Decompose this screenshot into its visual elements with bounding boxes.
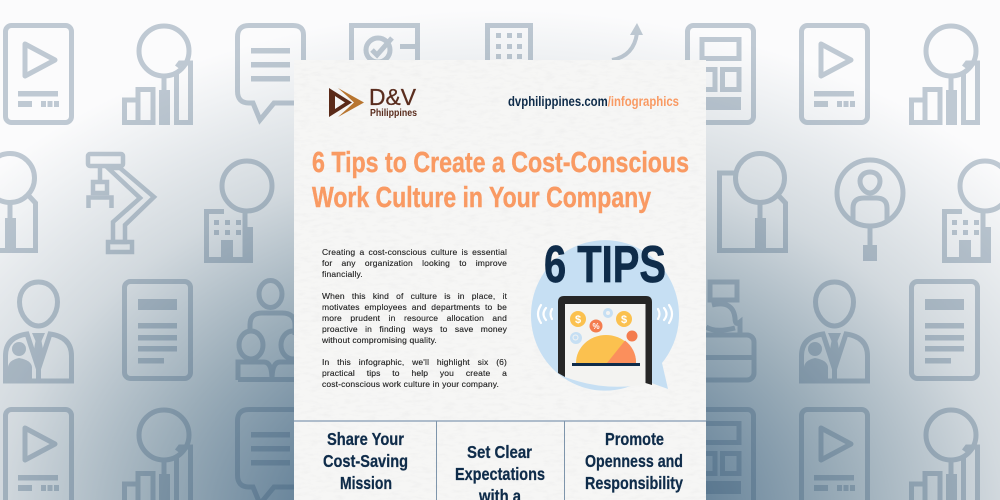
logo: D&V Philippines: Philippines <box>370 108 417 119</box>
illustration: tablet in speech bubble <box>531 240 679 391</box>
intro paragraph 2: proactive in finding ways to save money <box>322 324 507 334</box>
tip column 2: Expectations <box>455 464 545 484</box>
intro paragraph 3 <box>322 357 507 389</box>
intro paragraph 2: without compromising quality. <box>322 335 437 345</box>
tip column 1: Mission <box>340 473 392 493</box>
logo: D&V Philippines <box>329 84 417 119</box>
coins <box>570 308 638 344</box>
website url: dvphilippines.com/infographics <box>508 93 679 109</box>
tablet screen <box>565 304 646 387</box>
sound waves <box>538 305 672 323</box>
title <box>312 147 689 214</box>
title: Work Culture in Your Company <box>312 182 651 214</box>
row 2 icons <box>0 154 1000 263</box>
intro paragraph 3: cost-conscious work culture in your company. <box>322 379 499 389</box>
tip column 3: Promote <box>605 429 664 449</box>
intro paragraph 3: practical tips to help you create a <box>322 368 507 378</box>
intro paragraph 1 <box>322 247 507 279</box>
tablet frame <box>558 296 652 385</box>
intro text block <box>322 247 507 389</box>
coins: % <box>592 322 600 331</box>
row 3 icons <box>6 280 978 382</box>
intro paragraph 2: more prudent in resource allocation and <box>322 313 507 323</box>
coins: $ <box>621 314 627 326</box>
speech bubble <box>531 240 679 391</box>
tip column 2: Set Clear <box>467 442 532 462</box>
tip column 1 <box>323 429 408 493</box>
tip column 1: Cost-Saving <box>323 451 408 471</box>
heading: 6 TIPS: 6 TIPS <box>544 236 666 294</box>
intro paragraph 2: motivates employees and departments to be <box>322 302 507 312</box>
intro paragraph 2: When this kind of culture is in place, it <box>322 291 507 301</box>
tip column 3: Openness and <box>585 451 683 471</box>
title: 6 Tips to Create a Cost-Conscious <box>312 147 689 179</box>
tip column 3 <box>585 429 683 493</box>
row 4 icons <box>6 410 978 500</box>
coins: $ <box>575 314 581 326</box>
intro paragraph 3: In this infographic, we'll highlight six (6) <box>322 357 507 367</box>
row 1 icons <box>6 23 978 125</box>
intro paragraph 2 <box>322 291 507 345</box>
tip column 2 <box>455 442 545 500</box>
divider lines <box>294 420 706 500</box>
tip column 1: Share Your <box>327 429 404 449</box>
intro paragraph 1: financially. <box>322 269 363 279</box>
intro paragraph 1: Creating a cost-conscious culture is essential <box>322 247 507 257</box>
panel: paper card <box>294 60 706 500</box>
gauge <box>576 335 636 363</box>
logo: D&V Philippines: D&V <box>369 84 417 110</box>
intro paragraph 1: for any organization looking to improve <box>322 258 507 268</box>
tip column 3: Responsibility <box>585 473 683 493</box>
